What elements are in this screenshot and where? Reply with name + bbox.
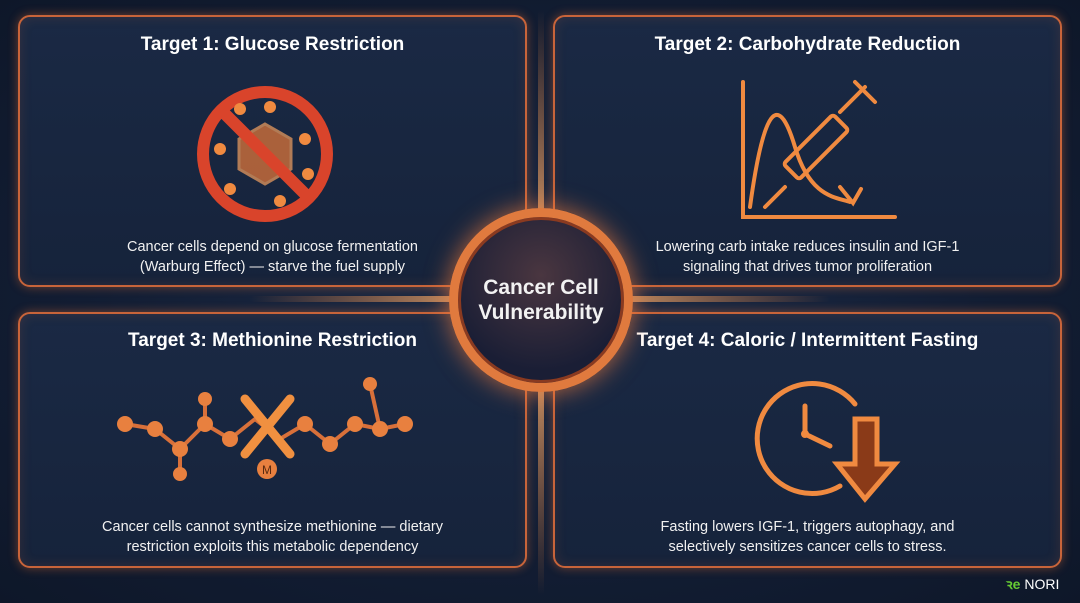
panel: target 2: [553, 15, 1062, 287]
text: target 3: Cancer cells cannot synthesize methionine — dietary: [102, 519, 443, 535]
panel: target 1: [18, 15, 527, 287]
central circle: Vulnerability: [478, 301, 604, 324]
logo: NORI: ꝛe NORI: [1006, 576, 1059, 592]
text: target 4: Fasting lowers IGF-1, triggers autophagy, and: [661, 519, 954, 535]
text: target 1: [127, 239, 418, 275]
central circle: [449, 208, 633, 392]
text: target 4: selectively sensitizes cancer cells to stress.: [668, 539, 946, 555]
text: target 1: (Warburg Effect) — starve the fuel supply: [140, 259, 405, 275]
panel: target 3: [18, 312, 527, 568]
panel: target 4: [553, 312, 1062, 568]
heading: target 4: Target 4: Caloric / Intermittent Fasting: [637, 330, 978, 351]
heading: target 2: Target 2: Carbohydrate Reduction: [655, 34, 960, 55]
icon: insulin curve and syringe: [741, 80, 897, 219]
heading: target 1: Target 1: Glucose Restriction: [141, 34, 404, 55]
icon: clock with down arrow: [754, 381, 900, 503]
text: target 2: signaling that drives tumor proliferation: [683, 259, 932, 275]
text: target 3: [102, 519, 443, 555]
icon: methionine chain crossed: [117, 377, 413, 481]
text: target 1: Cancer cells depend on glucose fermentation: [127, 239, 418, 255]
icon: crossed molecule: [197, 86, 333, 222]
text: target 4: [661, 519, 954, 555]
text: target 2: [656, 239, 959, 275]
text: target 3: restriction exploits this metabolic dependency: [127, 539, 418, 555]
heading: target 3: Target 3: Methionine Restriction: [128, 330, 417, 351]
icon: methionine chain crossed: M: [262, 463, 272, 477]
text: target 2: Lowering carb intake reduces insulin and IGF-1: [656, 239, 959, 255]
central circle: Cancer Cell: [483, 276, 599, 299]
